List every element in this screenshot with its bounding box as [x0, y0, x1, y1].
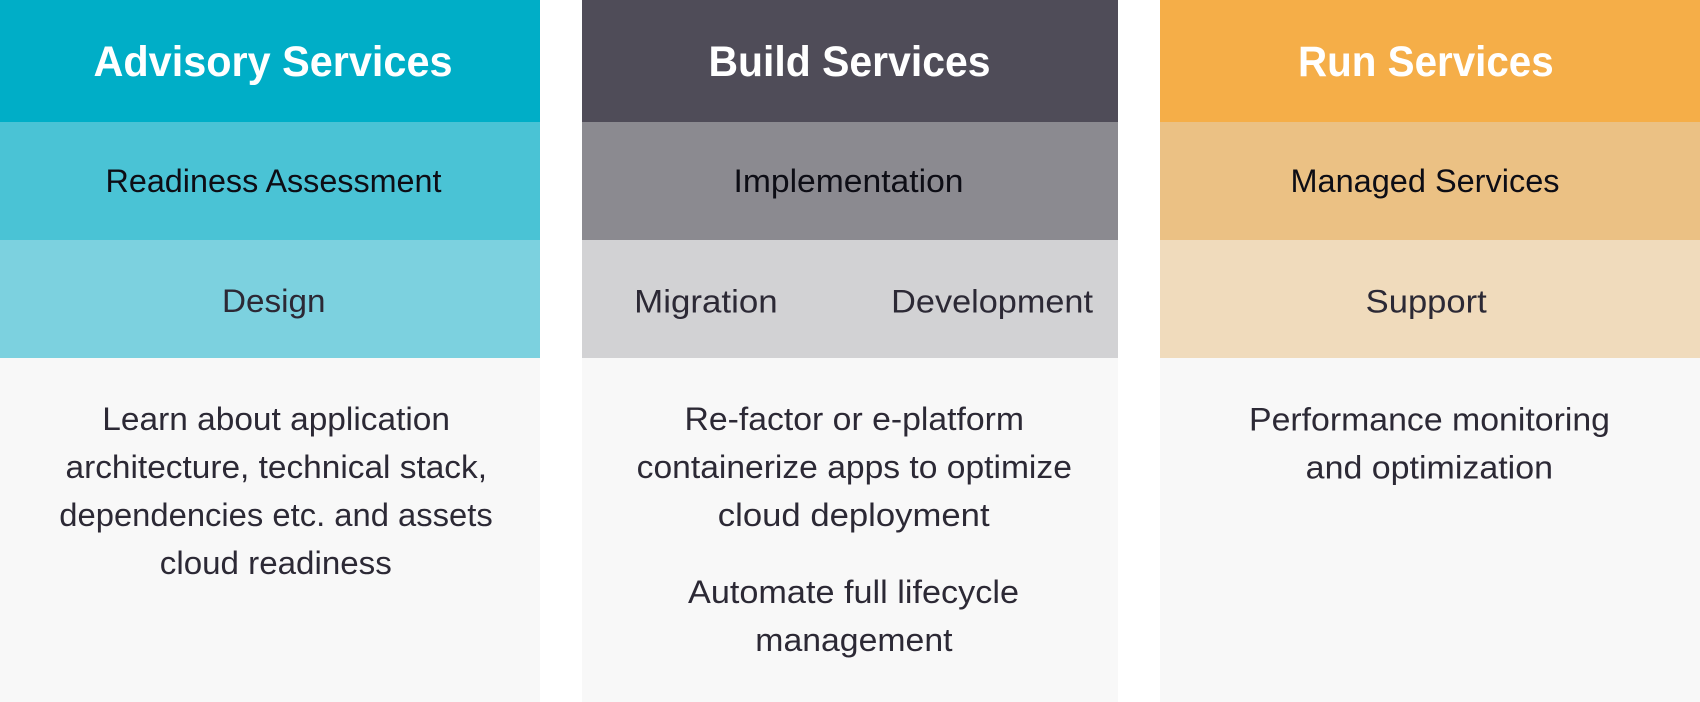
text block: Advisory description: cloud readiness [160, 545, 392, 581]
text block: Advisory description [0, 358, 540, 702]
text block: Build description: cloud deployment [718, 497, 990, 533]
text block: Advisory description: dependencies etc. and assets [59, 497, 493, 533]
band: Design [0, 240, 540, 358]
panel: Run Services column [1160, 0, 1700, 702]
text block: Run description: Performance monitoring [1249, 401, 1610, 437]
band: Migration and Development: Development [891, 283, 1093, 319]
header: Build Services [582, 0, 1118, 122]
panel: Advisory Services column [0, 0, 540, 702]
header: Run Services: Run Services [1298, 38, 1554, 86]
text block: Run description [1160, 358, 1700, 702]
text block: Build description: containerize apps to optimize [637, 449, 1072, 485]
header: Advisory Services: Advisory Services [94, 38, 452, 86]
band: Readiness Assessment [0, 122, 540, 240]
band: Readiness Assessment: Readiness Assessment [106, 163, 442, 199]
header: Run Services [1160, 0, 1700, 122]
band: Support [1160, 240, 1700, 358]
text block: Build description [582, 358, 1118, 702]
text block: Run description: and optimization [1306, 449, 1553, 485]
header: Advisory Services [0, 0, 540, 122]
band: Managed Services: Managed Services [1290, 163, 1560, 199]
text block: Build description: management [755, 622, 953, 658]
band: Design: Design [222, 283, 326, 319]
band: Support: Support [1366, 283, 1487, 319]
header: Build Services: Build Services [708, 38, 990, 86]
band: Migration and Development: Migration [634, 283, 778, 319]
band: Implementation [582, 122, 1118, 240]
band: Implementation: Implementation [734, 163, 964, 199]
text block: Build description: Automate full lifecycle [688, 574, 1019, 610]
band: Migration and Development [582, 240, 1118, 358]
text block: Advisory description: Learn about application [102, 401, 450, 437]
band: Managed Services [1160, 122, 1700, 240]
text block: Advisory description: architecture, technical stack, [66, 449, 487, 485]
text block: Build description: Re-factor or e-platform [684, 401, 1024, 437]
panel: Build Services column [582, 0, 1118, 702]
